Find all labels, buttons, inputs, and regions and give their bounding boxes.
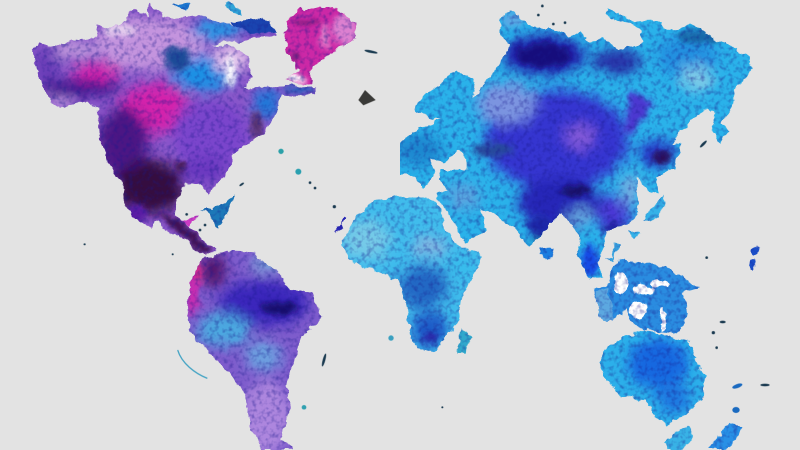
paint splatter dots xyxy=(84,5,770,413)
stroke: South Pacific paint streak xyxy=(178,350,207,378)
continent: Africa xyxy=(341,195,482,352)
icon: dark rock island xyxy=(358,90,376,105)
continent: Australia xyxy=(600,330,707,426)
continent: Greenland xyxy=(284,6,356,86)
continent: Eurasia xyxy=(400,8,753,280)
islands: small landmasses xyxy=(45,122,758,450)
islands: Arctic and Caribbean xyxy=(173,3,346,233)
continent: North America xyxy=(32,2,316,256)
continent: South America xyxy=(186,250,322,450)
islands: Indonesia archipelago xyxy=(593,243,700,333)
